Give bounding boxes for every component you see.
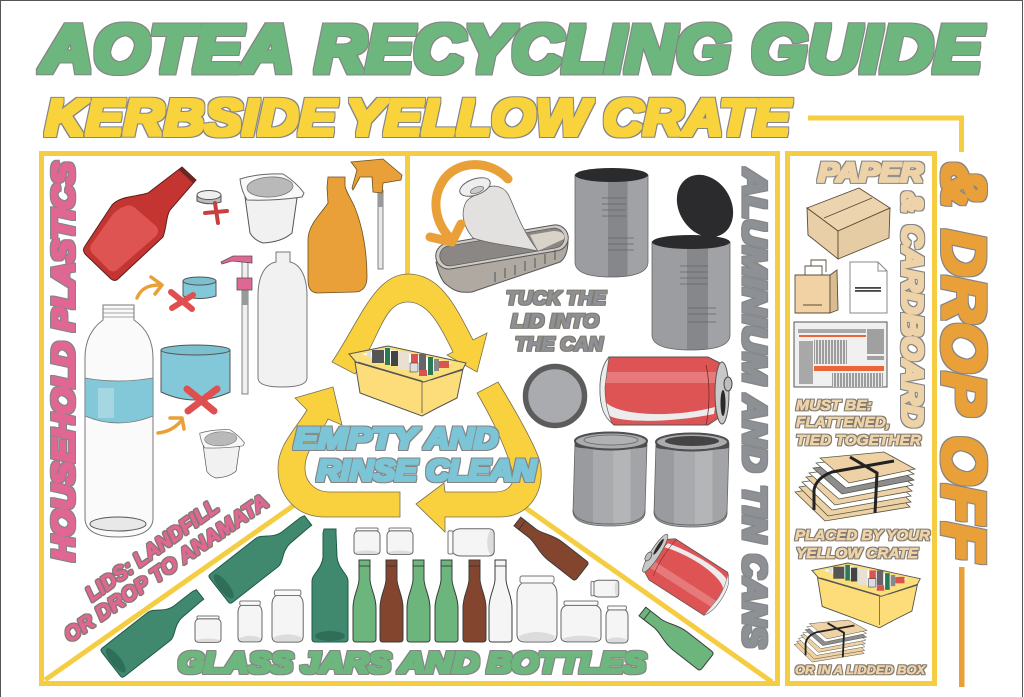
icon: catalogue page (794, 322, 887, 387)
title (39, 12, 985, 87)
note: empty and rinse clean: EMPTY (294, 422, 421, 456)
icon: large jar (517, 576, 557, 642)
icon: green bottle tilted (635, 602, 714, 671)
icon: jar (387, 528, 413, 554)
icon: large water bottle (85, 305, 153, 537)
note: must be flattened tied together: FLATTENED, (796, 415, 890, 431)
vertical heading: aluminium and tin cans: CANS (736, 554, 772, 649)
icon: pump dispenser (221, 256, 252, 394)
icon: yellow crate small (812, 563, 920, 628)
title: AOTEA (39, 12, 294, 87)
note: tuck the lid into the can: TUCK THE (506, 288, 607, 310)
heading: kerbside yellow crate: YELLOW (346, 89, 593, 146)
heading: kerbside yellow crate: CRATE (603, 89, 792, 146)
panel: paper items (794, 188, 920, 662)
panel: glass jars and bottles (100, 506, 714, 678)
heading: kerbside yellow crate: KERBSIDE (45, 89, 338, 146)
note: placed by your yellow crate: PLACED BY YOUR (795, 528, 931, 544)
panel: paper and cardboard frame (788, 154, 934, 684)
icon: small arrow to cap (137, 277, 162, 298)
icon: tall tin can (575, 168, 648, 277)
vertical heading: drop off: & (930, 163, 997, 208)
icon: document (850, 262, 887, 313)
icon: small cap with cross (197, 190, 227, 223)
icon: short tin closed (573, 432, 647, 526)
note: lids: LIDS: LANDFILL (81, 495, 223, 606)
vertical heading: household plastics: PLASTICS (46, 161, 80, 331)
icon: beer bottle clear (489, 560, 512, 642)
icon: tied bundle of flattened card (795, 452, 915, 521)
icon: large blue cap with cross (161, 345, 230, 411)
icon: cardboard box (807, 188, 890, 259)
icon: tin lid (526, 366, 584, 426)
heading: glass jars and bottles (178, 648, 647, 680)
heading: glass jars and bottles: JARS (301, 648, 392, 680)
vertical heading: aluminium and tin cans (736, 168, 772, 649)
vertical heading: and cardboard: CARDBOARD (896, 225, 928, 427)
icon: small arrow to large cap (158, 418, 184, 433)
icon: red can upright (600, 357, 732, 425)
vertical heading: aluminium and tin cans: TIN (736, 485, 772, 543)
arrow: left (278, 387, 400, 517)
icon: beer bottle brown (380, 560, 403, 642)
icon: beer bottle green (353, 560, 376, 642)
note: or in a lidded box: OR IN A LIDDED BOX (795, 665, 926, 677)
icon: jar (354, 528, 380, 554)
icon: sardine tin with lid (430, 165, 570, 292)
note: lids: OR DROP TO ANAMATA (60, 490, 273, 647)
note: tuck the lid into the can: THE CAN (515, 334, 604, 356)
heading: glass jars and bottles: GLASS (178, 648, 294, 680)
icon: jar (195, 616, 221, 642)
vertical heading: household plastics: HOUSEHOLD (46, 342, 80, 561)
icon: paper bag (795, 260, 838, 313)
icon: jar (272, 590, 303, 642)
vertical heading: household plastics (46, 161, 80, 561)
icon: beer bottle brown (463, 560, 486, 642)
icon: yoghurt pot small (200, 430, 244, 478)
icon: open tin can with lid (652, 164, 745, 350)
group: recycling arrows (278, 274, 541, 532)
title: GUIDE (751, 12, 985, 87)
icon: wine bottle tilted lower (100, 580, 211, 678)
note: tuck the lid into the can: LID INTO (511, 310, 599, 332)
icon: orange spray bottle (308, 159, 402, 293)
drop off line (959, 567, 964, 687)
icon: wine bottle upright (312, 529, 348, 642)
note: tuck the lid into the can (506, 288, 607, 356)
main yellow frame (42, 154, 778, 684)
icon: tiny jar on its side (591, 580, 619, 597)
connector line: kerbside heading to drop off (808, 118, 962, 152)
note: empty and rinse clean: AND (424, 422, 498, 456)
icon: narrow jar (606, 606, 628, 643)
note: empty and rinse clean (294, 422, 537, 488)
icon: wine bottle tilted upper (208, 506, 319, 604)
heading: glass jars and bottles: AND (398, 648, 479, 680)
icon: medium jar (561, 601, 601, 642)
vertical heading: and cardboard: & (896, 192, 928, 213)
note: must be flattened tied together: MUST BE: (796, 398, 872, 414)
panel: household plastics items (84, 159, 402, 537)
note: empty and rinse clean: CLEAN (426, 454, 537, 488)
note: must be flattened tied together: TIED TOGETHER (796, 433, 922, 449)
icon: yoghurt pot large (240, 174, 304, 243)
icon: short tin open (654, 434, 729, 527)
vertical heading: drop off: OFF (930, 436, 997, 562)
note: must be flattened tied together (796, 398, 922, 449)
icon: blue cap with cross (171, 277, 216, 309)
vertical heading: drop off (930, 163, 997, 562)
icon: central yellow crate (349, 346, 466, 416)
arrow: right (416, 382, 541, 532)
icon: beer bottle green (407, 560, 430, 642)
heading: glass jars and bottles: BOTTLES (487, 648, 647, 680)
title: RECYCLING (315, 12, 731, 87)
heading: paper: PAPER (818, 158, 924, 188)
note: empty and rinse clean: RINSE (317, 454, 418, 488)
panel: aluminium and tin items (430, 164, 745, 618)
arrow: top (332, 274, 487, 374)
icon: brown bottle tilted (510, 512, 589, 581)
vertical heading: aluminium and tin cans: AND (736, 394, 772, 472)
icon: beer bottle green (435, 560, 458, 642)
vertical heading: drop off: DROP (930, 230, 997, 416)
heading: kerbside yellow crate (45, 89, 792, 146)
icon: red can tilted (636, 530, 735, 618)
icon: small tied bundle (794, 620, 867, 662)
icon: jar on its side (448, 529, 494, 556)
note: placed by your yellow crate: YELLOW CRATE (796, 546, 919, 562)
vertical heading: aluminium and tin cans: ALUMINIUM (736, 168, 772, 386)
icon: ketchup bottle (84, 167, 196, 280)
note: placed by your yellow crate (795, 528, 931, 562)
icon: white plastic bottle (258, 252, 307, 387)
icon: jar (238, 601, 262, 642)
